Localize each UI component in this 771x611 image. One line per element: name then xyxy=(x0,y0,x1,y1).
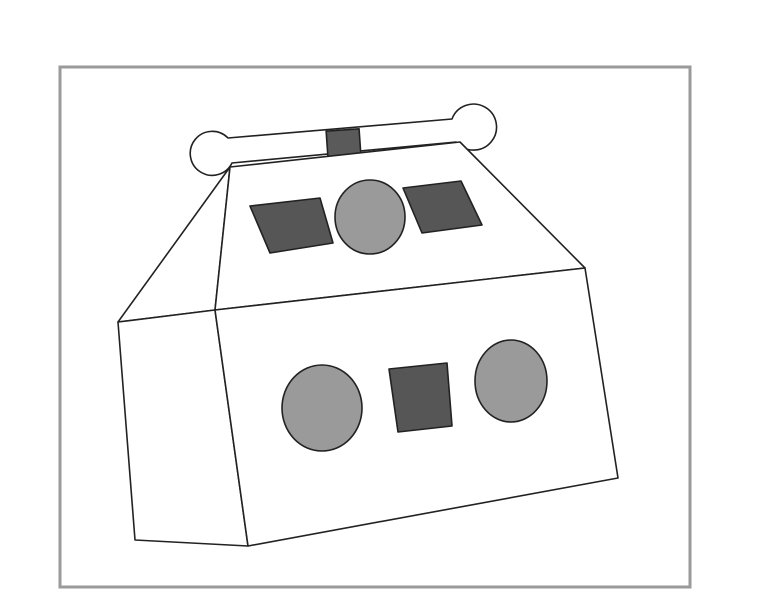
roof left side xyxy=(118,167,230,322)
roof front xyxy=(215,142,585,310)
body left side xyxy=(118,310,248,546)
handle xyxy=(190,104,497,175)
panel: frame xyxy=(60,67,690,587)
body front xyxy=(215,268,618,546)
illustration: box with handle xyxy=(118,104,618,546)
